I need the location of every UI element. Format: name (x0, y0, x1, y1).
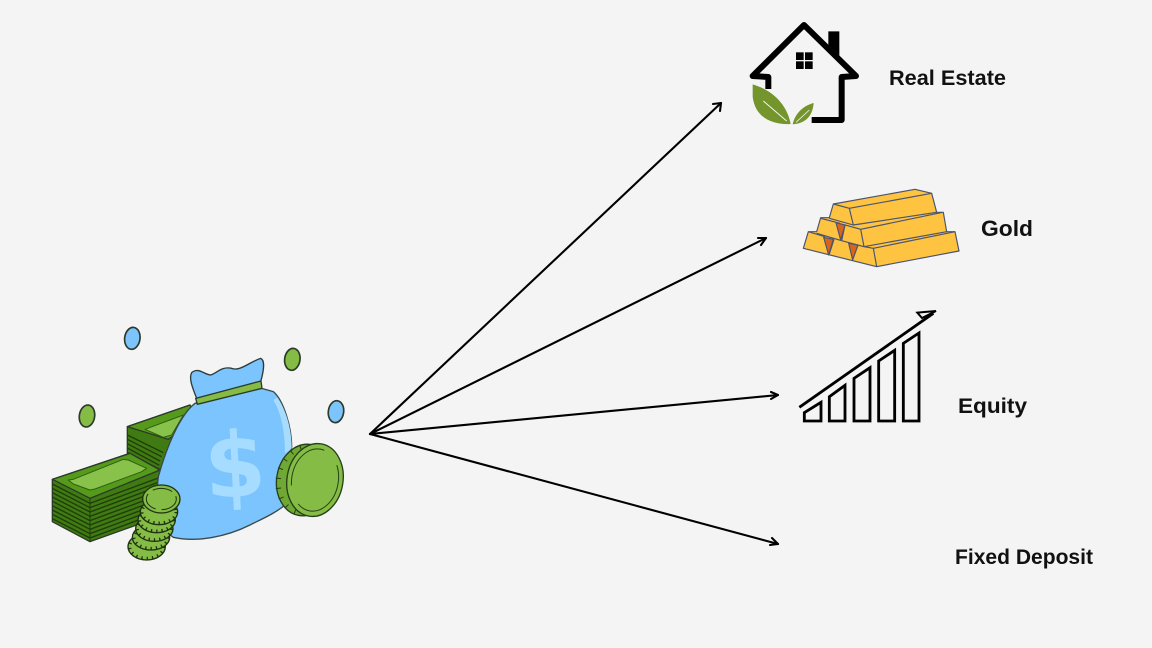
window (796, 52, 813, 69)
label: fixed deposit: Fixed Deposit (955, 546, 1093, 569)
icon: house with leaves (753, 25, 856, 124)
label: equity: Equity (958, 395, 1027, 418)
icon: big leaf (753, 84, 791, 124)
trend arrow (799, 313, 933, 407)
icon: gold bars (803, 189, 959, 267)
dollar sign: $ (202, 412, 268, 520)
icon: back cash stack (127, 405, 197, 469)
bag highlight (273, 397, 292, 453)
arrow: to gold (370, 238, 766, 434)
bars (804, 333, 919, 421)
icon: coin stack (128, 485, 180, 560)
icon: small leaf (793, 103, 814, 124)
gaps between bars (824, 237, 833, 255)
label: real estate: Real Estate (889, 67, 1006, 90)
icon: bag neck (191, 358, 264, 398)
arrow: to fixed deposit (370, 434, 778, 545)
icon: front cash stack (52, 453, 160, 542)
icon: floating coins (78, 326, 345, 428)
arrow: to real estate (370, 103, 721, 434)
label: gold: Gold (981, 216, 1033, 241)
edges (808, 193, 955, 267)
icon: bag band (196, 381, 262, 404)
chimney (828, 31, 839, 56)
icon: equity growth chart (799, 311, 936, 421)
icon: large coin (271, 439, 349, 521)
gold silhouette (803, 189, 959, 267)
icon: money bag with cash and coins (52, 326, 349, 560)
arrow: to equity (370, 392, 778, 434)
arrows (370, 103, 778, 545)
roof and walls (753, 25, 856, 120)
icon: bag body (157, 388, 292, 539)
